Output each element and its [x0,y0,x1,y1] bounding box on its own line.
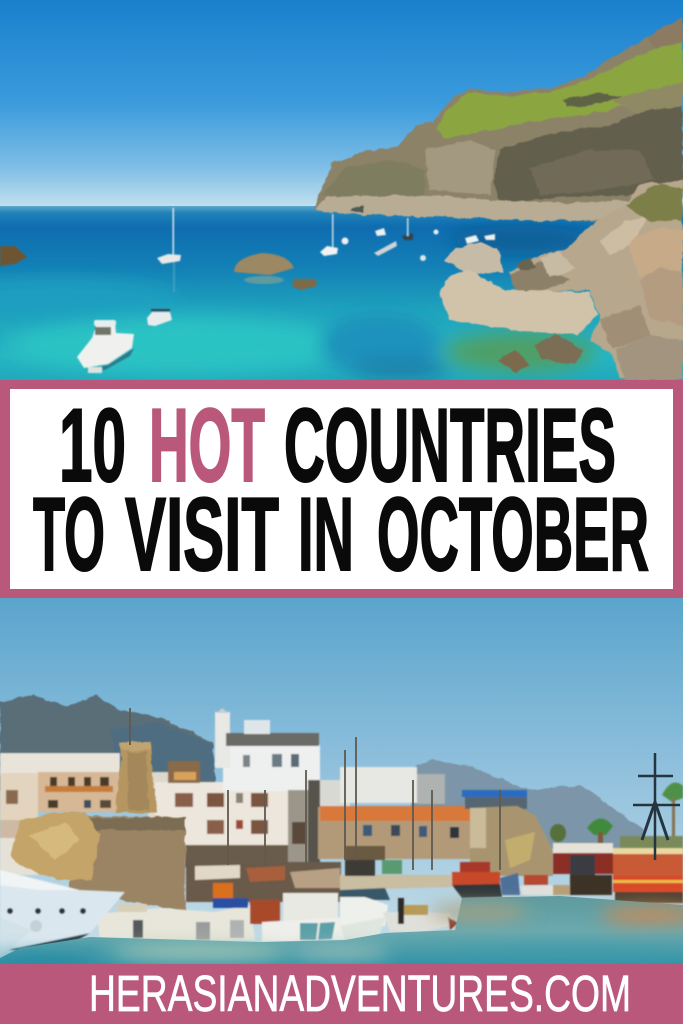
shaded rock face [493,105,683,204]
mountains [0,695,643,850]
second bow [0,917,32,958]
title banner [0,380,683,598]
small motorboat [147,312,172,326]
pirate ship [613,848,683,854]
blue awning terrace [465,797,527,809]
shore rocks [440,180,683,380]
title line 1: HOT [149,388,265,504]
photo: turquoise bay with cliffs [0,0,683,382]
title line 2 [33,477,649,593]
title line 2: IN [298,477,354,593]
sea [0,206,683,382]
white pearl hotel [155,782,290,848]
foreground boats left [97,905,255,941]
reflections [0,904,683,965]
white block [320,780,350,810]
title line 2: VISIT [125,477,279,593]
sky [0,0,683,208]
title line 1 [59,388,616,504]
headland cliff [315,17,683,222]
moored boats [0,843,683,958]
masts [130,708,680,870]
harbour water [0,896,683,966]
title line 2: TO [33,477,105,593]
sky [0,596,683,966]
sailboat [157,254,181,264]
stone tower and fort [10,742,186,912]
boats [77,208,495,373]
harbour buildings [0,708,566,876]
title line 1: 10 [59,388,126,504]
british hotel [223,745,320,791]
palms [587,783,683,850]
motor yacht [77,322,134,368]
red boats [452,872,500,885]
back row of boats [186,862,341,902]
left buildings [0,753,120,775]
small rocks [0,246,317,290]
green slope [436,38,683,138]
distant moored boats [320,246,338,256]
orange roof building [318,807,470,859]
yacht [0,870,125,947]
red restaurant [553,852,613,874]
pale backdrop behind fort [0,830,40,875]
stone fort tower [470,806,553,876]
photo: Kyrenia harbour [0,596,683,966]
pale cliff base [316,195,630,221]
